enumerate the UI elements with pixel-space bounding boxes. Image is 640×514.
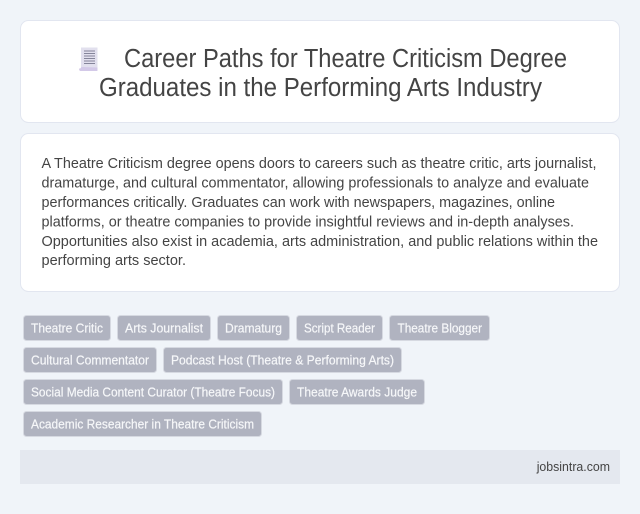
tag: Podcast Host bbox=[164, 348, 402, 372]
text block: description: performances critically. Graduates can work with newspapers, magazines, online bbox=[42, 194, 555, 211]
icon: paper scroll bbox=[79, 48, 98, 71]
title: Graduates in the Performing Arts Industry bbox=[99, 74, 542, 102]
tag: Theatre Critic bbox=[24, 316, 110, 340]
footer: jobsintra.com bbox=[536, 459, 610, 474]
footer bbox=[20, 450, 620, 484]
tag: Social Media Content Curator: Social Media Content Curator (Theatre Focus) bbox=[31, 384, 275, 400]
tag: Dramaturg bbox=[218, 316, 290, 340]
text block: description: performing arts sector. bbox=[42, 252, 186, 269]
panel: header card bbox=[20, 20, 620, 122]
tag: Arts Journalist bbox=[118, 316, 210, 340]
tag: Academic Researcher bbox=[24, 412, 262, 436]
tag: Script Reader: Script Reader bbox=[304, 320, 376, 336]
tag: Script Reader bbox=[296, 316, 382, 340]
tag: Theatre Critic: Theatre Critic bbox=[31, 320, 103, 336]
tag: Theatre Awards Judge: Theatre Awards Judge bbox=[297, 384, 417, 400]
tag: Dramaturg: Dramaturg bbox=[225, 320, 282, 336]
text block: description: Opportunities also exist in academia, arts administration, and public relations within the bbox=[42, 233, 598, 250]
tag: Academic Researcher: Academic Researcher in Theatre Criticism bbox=[31, 416, 254, 432]
tag: Theatre Blogger bbox=[390, 316, 490, 340]
tag: Social Media Content Curator bbox=[24, 380, 282, 404]
tag: Arts Journalist: Arts Journalist bbox=[125, 320, 203, 336]
text block: description bbox=[42, 155, 598, 269]
text block: description: dramaturge, and cultural commentator, allowing professionals to analyze and evaluate bbox=[42, 174, 589, 192]
title: Career Paths for Theatre Criticism Degree bbox=[124, 45, 567, 73]
tag: Cultural Commentator: Cultural Commentator bbox=[31, 352, 150, 368]
tag: Podcast Host: Podcast Host (Theatre & Performing Arts) bbox=[171, 352, 394, 368]
tag: Cultural Commentator bbox=[24, 348, 156, 372]
text block: description: platforms, or theatre companies to provide insightful reviews and in-depth analyses. bbox=[42, 214, 574, 230]
tag: Theatre Blogger: Theatre Blogger bbox=[398, 320, 483, 336]
tag: Theatre Awards Judge bbox=[290, 380, 424, 404]
panel: description card bbox=[20, 134, 620, 292]
title bbox=[99, 45, 567, 102]
text block: description: A Theatre Criticism degree opens doors to careers such as theatre critic, arts journalist, bbox=[42, 155, 596, 172]
